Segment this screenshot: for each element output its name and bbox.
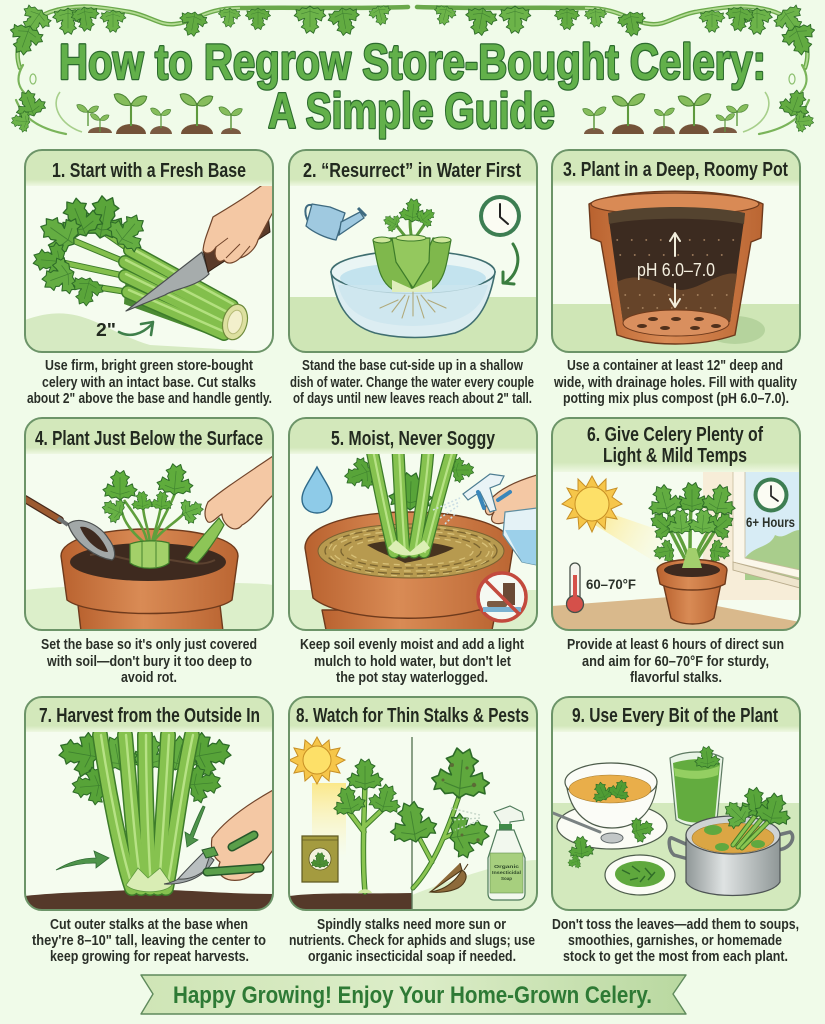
text block: step 2: of days until new leaves reach about 2" tall. [293, 391, 532, 407]
text block: step 1: Use firm, bright green store-bought [45, 358, 253, 374]
icon: dish of chopped celery [605, 855, 675, 895]
text block: step 8: organic insecticidal soap if needed. [308, 949, 516, 965]
icon: hand with knife [126, 177, 273, 311]
panel frame [289, 150, 537, 352]
panel 1: start with a fresh base [25, 150, 273, 407]
icon: spray bottle and hand [433, 474, 537, 565]
text block: step 9: stock to get the most from each plant. [563, 949, 788, 965]
heading band [25, 697, 273, 732]
label: 2 inches: 2" [96, 320, 116, 340]
text block: step 2: Stand the base cut-side up in a shallow [302, 358, 524, 374]
text block: step 2 [290, 358, 534, 407]
icon: clock [479, 195, 521, 237]
panel frame [25, 418, 273, 630]
panel 6: light and mild temps [552, 418, 800, 686]
panel 8: thin stalks and pests [289, 697, 537, 965]
text block: step 8: nutrients. Check for aphids and slugs; use [289, 933, 535, 949]
icon: thermometer [566, 563, 584, 612]
heading: step 2: 2. “Resurrect” in Water First [303, 160, 521, 182]
sun beam [312, 783, 346, 858]
text block: step 9: smoothies, garnishes, or homemade [568, 933, 782, 949]
icon: organic insecticidal soap spray: Organic [494, 864, 520, 869]
arrow: down [670, 284, 680, 307]
arrow: inward [56, 851, 109, 870]
heading band [289, 150, 537, 186]
heading band [25, 150, 273, 186]
table surface [289, 297, 537, 352]
spray mist [450, 808, 480, 830]
heading: step 6: 6. Give Celery Plenty of [587, 424, 763, 446]
heading: step 1: 1. Start with a Fresh Base [52, 160, 246, 182]
icon: terracotta pot cross-section [589, 191, 763, 344]
heading band [289, 697, 537, 732]
panel 7: harvest from the outside in [25, 697, 273, 965]
arrow: up [670, 233, 680, 256]
text block: step 1: about 2" above the base and handle gently. [27, 391, 272, 407]
icon: bowl of water with celery base [331, 198, 495, 338]
title [59, 34, 766, 139]
text block: step 3: potting mix plus compost (pH 6.0–7.0). [563, 391, 789, 407]
heading: step 8: 8. Watch for Thin Stalks & Pests [296, 705, 529, 727]
heading band [289, 418, 537, 454]
title: A Simple Guide [268, 83, 555, 139]
icon: celery stalks [340, 450, 474, 556]
left garland [4, 1, 408, 134]
heading: step 4: 4. Plant Just Below the Surface [35, 428, 263, 450]
text block: step 7: Cut outer stalks at the base when [50, 917, 248, 933]
text block: step 3: Use a container at least 12" deep and [567, 358, 783, 374]
text block: step 6 [567, 637, 784, 686]
table top [552, 597, 800, 630]
panel frame [25, 697, 273, 910]
panel frame [552, 418, 800, 630]
text block: step 6: Provide at least 6 hours of direct sun [567, 637, 784, 653]
arrow: toward base [185, 806, 205, 847]
icon: hand with pruners [164, 790, 273, 884]
roots [380, 292, 446, 318]
heading: step 6: Light & Mild Temps [603, 445, 747, 467]
icon: hand with stalk [186, 456, 273, 563]
panel frame [552, 150, 800, 352]
heading: step 5: 5. Moist, Never Soggy [331, 428, 496, 450]
icon: potted celery [644, 481, 740, 624]
icon: sun [289, 737, 345, 784]
text block: step 9 [552, 917, 799, 965]
table surface [552, 803, 800, 910]
text block: step 1 [27, 358, 272, 407]
panel 3: plant in a deep roomy pot [552, 150, 800, 407]
text block: step 7: keep growing for repeat harvests. [50, 949, 249, 965]
arrow: clock to dish [503, 244, 518, 284]
heading: step 7: 7. Harvest from the Outside In [39, 705, 260, 727]
icon: stock pot [669, 785, 795, 896]
soil [289, 893, 412, 910]
spoon [553, 813, 600, 832]
icon: clock [754, 478, 788, 512]
icon: fertilizer bag [302, 836, 338, 882]
icon: organic insecticidal soap spray: Soap [501, 876, 512, 881]
panel 9: use every bit of the plant [552, 697, 800, 965]
arrow: to base [119, 322, 153, 335]
heading band [552, 697, 800, 732]
icon: spindly seedling [329, 759, 405, 893]
panel frame [289, 697, 537, 910]
footer ribbon banner [141, 975, 686, 1014]
panel frame [25, 150, 273, 352]
text block: step 3 [553, 358, 797, 407]
text block: step 5: the pot stay waterlogged. [336, 670, 488, 686]
text block: step 4 [41, 637, 257, 686]
text block: step 6: flavorful stalks. [630, 670, 722, 686]
icon: no soggy pot sign [478, 573, 526, 621]
icon: celery bunch [31, 192, 251, 342]
icon: sun [562, 476, 622, 532]
panel 5: moist never soggy [289, 418, 537, 686]
text block: step 8 [289, 917, 535, 965]
right garland [417, 1, 821, 134]
panel frame [552, 697, 800, 910]
text block: step 8: Spindly stalks need more sun or [317, 917, 506, 933]
text block: step 5 [300, 637, 524, 686]
header decoration: vines, leaves and seedlings [4, 1, 821, 134]
text block: step 6: and aim for 60–70°F for sturdy, [582, 654, 769, 670]
icon: pot with soil [61, 529, 238, 640]
icon: celery base with sprouts [98, 463, 207, 568]
icon: soup bowl on plate [553, 763, 667, 871]
label: temperature: 60–70°F [586, 576, 636, 592]
icon: smoothie glass [670, 745, 723, 826]
icon: organic insecticidal soap spray [488, 806, 525, 900]
soil [25, 890, 273, 910]
ribbon shape [141, 975, 686, 1014]
icon: water drop [302, 467, 332, 513]
label: hours: 6+ Hours [746, 514, 795, 530]
icon: organic insecticidal soap spray: Insecticidal [492, 870, 521, 875]
sun beam [596, 515, 664, 564]
heading band [25, 418, 273, 454]
celery sprout [383, 198, 435, 235]
text block: step 4: avoid rot. [121, 670, 177, 686]
celery base stalks [373, 235, 451, 292]
text block: step 5: Keep soil evenly moist and add a light [300, 637, 524, 653]
icon: pest-damaged plant [386, 746, 492, 888]
text block: step 4: with soil—don't bury it too deep to [46, 654, 252, 670]
icon: trowel with soil [25, 499, 115, 560]
footer text: Happy Growing! Enjoy Your Home-Grown Celery. [173, 982, 652, 1009]
panel frame [289, 418, 537, 630]
label: pH range: pH 6.0–7.0 [637, 260, 715, 280]
icon: watering can [305, 204, 366, 240]
text block: step 1: celery with an intact base. Cut stalks [42, 375, 256, 391]
text block: step 7: they're 8–10" tall, leaving the center to [32, 933, 266, 949]
text block: step 4: Set the base so it's only just covered [41, 637, 257, 653]
panel 2: resurrect in water first [289, 150, 537, 407]
text block: step 2: dish of water. Change the water every couple [290, 375, 534, 391]
icon: pot with mulch [305, 512, 513, 640]
heading band [552, 150, 800, 186]
table surface [552, 304, 800, 352]
window and wall [703, 470, 800, 600]
heading: step 6 [587, 424, 763, 467]
text block: step 5: mulch to hold water, but don't let [314, 654, 511, 670]
panel 4: plant just below the surface [25, 418, 273, 686]
divider [411, 737, 413, 910]
icon: celery plant [56, 728, 234, 892]
heading band [552, 418, 800, 472]
text block: step 7 [32, 917, 266, 965]
icon: slug [430, 863, 468, 892]
